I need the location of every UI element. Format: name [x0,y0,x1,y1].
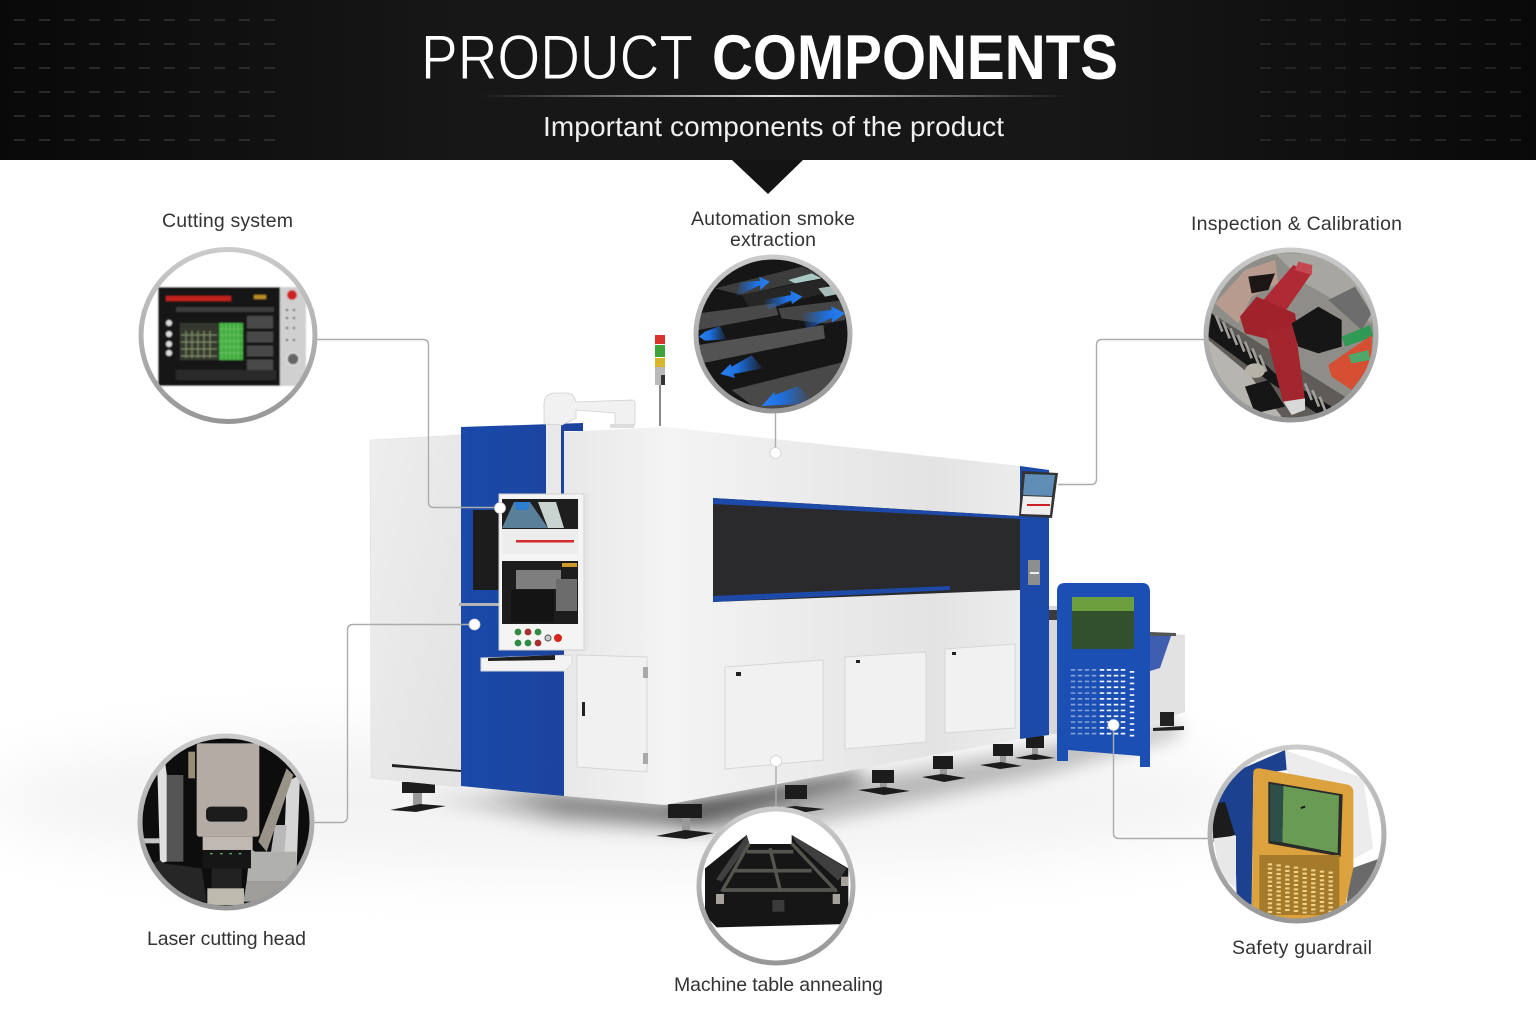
callout: laser cutting head [138,734,314,949]
photo: airflow channels [698,260,848,408]
control panel [499,494,589,650]
callout: cutting system [138,213,318,424]
photo: laser head [142,738,310,906]
photo: machine bed [705,812,848,928]
long face [665,427,1020,805]
light tower [655,335,665,426]
label: laser cutting head: Laser cutting head [147,928,306,950]
lower access panels [577,644,1015,772]
callout connector lines [314,340,1209,838]
photo: guard panel [1212,750,1378,918]
subtitle: Important components of the product [543,111,1004,142]
callout: machine table annealing [674,800,883,996]
label: automation smoke extraction: extraction [730,229,816,251]
small monitor [1019,471,1058,518]
title: COMPONENTS [712,23,1118,93]
callout: inspection and calibration [1191,213,1402,430]
label: cutting system: Cutting system [162,210,293,232]
callout dots [469,448,1119,766]
viewing window [713,495,1023,605]
photo: control screen [157,286,306,387]
machine [370,335,1185,839]
safety guard panel [1057,583,1150,767]
lens ring [696,257,850,411]
floor shadow [0,722,1260,870]
keyboard tray [481,655,572,671]
main side panel [564,427,665,805]
blue door [461,423,583,796]
label: machine table annealing: Machine table annealing [674,974,883,996]
label: inspection and calibration: Inspection & Calibration [1191,213,1402,235]
title: PRODUCT [421,23,693,93]
rear table unit [1049,606,1185,734]
lens ring [141,250,315,422]
machine feet [390,736,1055,839]
callout: safety guardrail [1208,744,1386,958]
header band [0,0,1536,160]
lens ring [1206,250,1376,420]
dash pattern right [1260,20,1521,140]
lens ring [1210,747,1384,921]
header pointer arrow [732,160,803,194]
label: safety guardrail: Safety guardrail [1232,937,1372,959]
lens ring [140,736,312,908]
left white panel [370,435,461,787]
monitor arm [544,393,635,495]
dash pattern left [14,20,275,140]
label: automation smoke extraction: Automation smoke [691,208,855,230]
lens ring [699,809,853,963]
photo: calibration handle [1208,252,1374,418]
right blue column [1020,466,1049,739]
callout: automation smoke extraction [691,211,854,414]
